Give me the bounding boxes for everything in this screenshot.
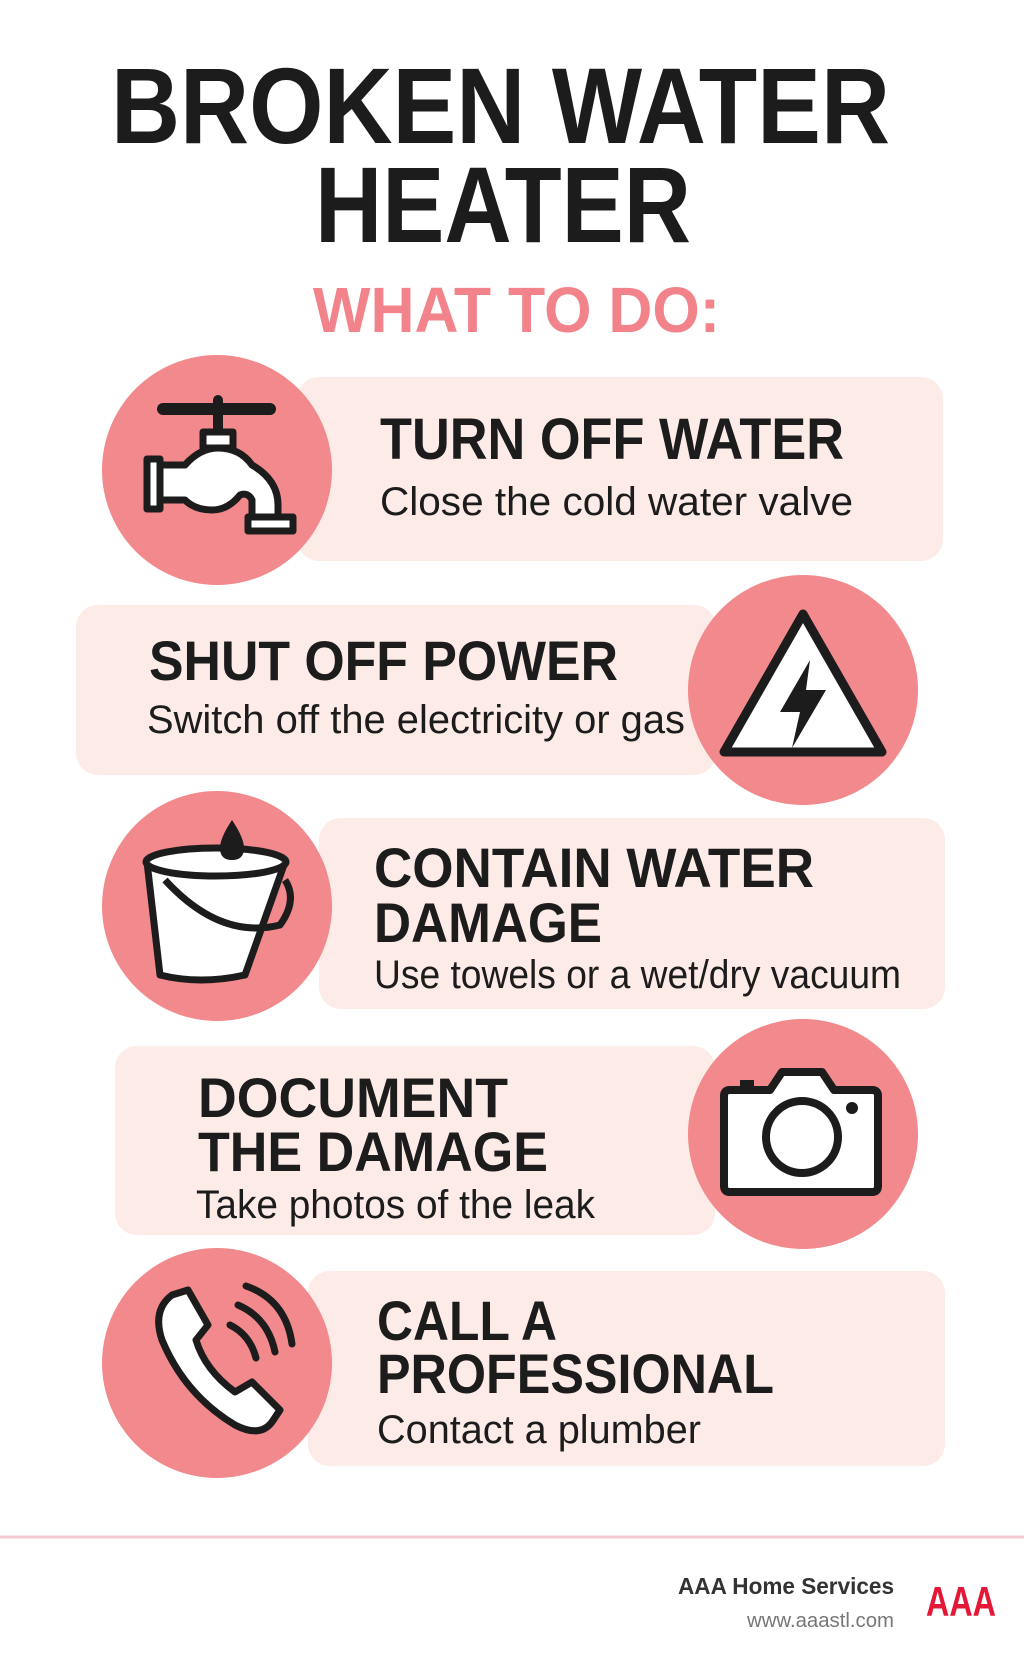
- text: Contact a plumber: [377, 1408, 701, 1452]
- heading: [377, 1289, 774, 1405]
- heading: THE DAMAGE: [198, 1120, 548, 1183]
- panel: document the damage: [115, 1019, 918, 1249]
- subtitle: WHAT TO DO:: [313, 274, 720, 346]
- heading: [198, 1066, 548, 1183]
- icon: bucket: [146, 820, 290, 980]
- heading: CONTAIN WATER: [374, 836, 814, 899]
- footer: company: www.aaastl.com: [746, 1610, 894, 1632]
- icon: warning triangle: [724, 614, 882, 752]
- icon: phone: [159, 1286, 292, 1431]
- title: [111, 45, 890, 265]
- heading: [374, 836, 814, 954]
- icon: faucet: [147, 400, 293, 531]
- text: Switch off the electricity or gas: [147, 698, 685, 742]
- text: Close the cold water valve: [380, 480, 853, 524]
- heading: TURN OFF WATER: [380, 407, 844, 472]
- title: HEATER: [315, 144, 691, 265]
- panel: shut off power: [76, 575, 918, 805]
- title: BROKEN WATER: [111, 45, 890, 166]
- heading: DAMAGE: [374, 891, 602, 954]
- heading: SHUT OFF POWER: [149, 629, 618, 692]
- footer: company: AAA Home Services: [678, 1573, 894, 1599]
- panel: turn off water: [102, 355, 943, 585]
- icon: camera: [724, 1072, 878, 1192]
- panel: call a professional: [102, 1248, 945, 1478]
- heading: DOCUMENT: [198, 1066, 508, 1129]
- text: Use towels or a wet/dry vacuum: [374, 953, 901, 997]
- footer: company: [678, 1573, 894, 1632]
- logo: AAA: AAA: [926, 1578, 996, 1625]
- heading: PROFESSIONAL: [377, 1342, 774, 1405]
- panel: contain water damage: [102, 791, 945, 1021]
- heading: CALL A: [377, 1289, 557, 1352]
- text: Take photos of the leak: [196, 1183, 596, 1227]
